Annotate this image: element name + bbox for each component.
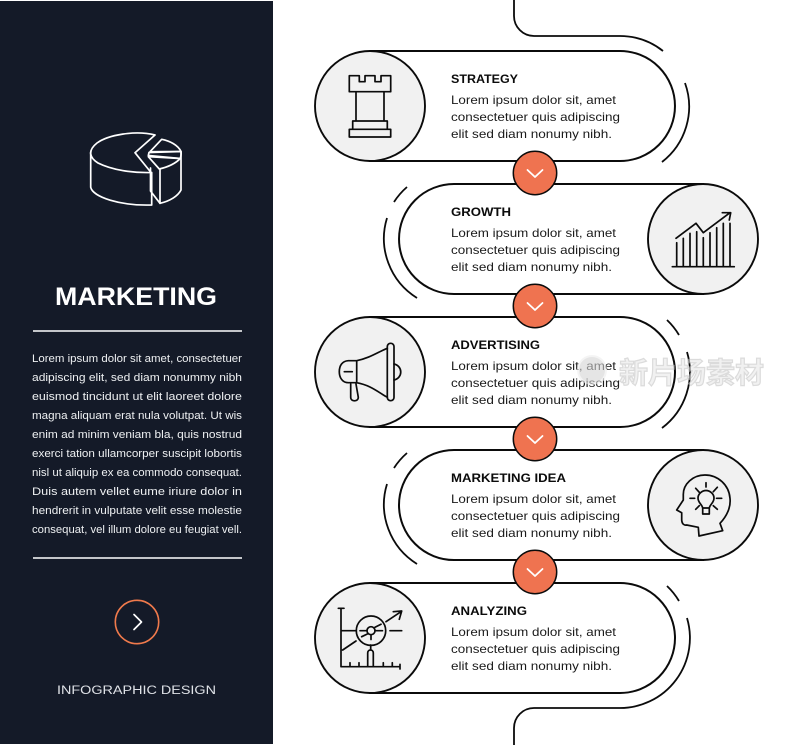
text: analyzing body: Lorem ipsum dolor sit, amet: [451, 626, 617, 639]
icon: chess rook: [315, 51, 425, 161]
sidebar paragraph: magna aliquam erat nula volutpat. Ut wis: [32, 410, 242, 422]
text: advertising body: consectetuer quis adipiscing: [451, 377, 620, 390]
heading: advertising: ADVERTISING: [451, 338, 540, 352]
icon: orange circle arrow: [115, 600, 159, 644]
sidebar paragraph: nisl ut aliquip ex ea commodo consequat.: [32, 467, 242, 479]
text: analyzing body: consectetuer quis adipiscing: [451, 643, 620, 656]
sidebar paragraph: [32, 353, 243, 536]
sidebar paragraph: euismod tincidunt ut elit laoreet dolore: [32, 391, 242, 403]
step 2: growth: [384, 184, 758, 298]
text: marketing idea body: Lorem ipsum dolor sit, amet: [451, 493, 617, 506]
badge: chevron 2: [513, 284, 557, 328]
watermark: 新片场素材: [619, 350, 764, 392]
sidebar paragraph: enim ad minim veniam bla, quis nostrud: [32, 429, 242, 441]
text: strategy body: [451, 94, 620, 141]
icon: 3D pie chart: [91, 133, 181, 205]
sidebar paragraph: consequat, vel illum dolore eu feugiat vell.: [32, 524, 242, 536]
text: advertising body: Lorem ipsum dolor sit, amet: [451, 360, 617, 373]
text: strategy body: elit sed diam nonumy nibh.: [451, 128, 612, 141]
sidebar paragraph: exerci tation ullamcorper suscipit lobortis: [32, 448, 242, 460]
icon: growth bar chart: [648, 184, 758, 294]
title: MARKETING: MARKETING: [55, 283, 217, 311]
panel: dark sidebar: [0, 1, 273, 744]
heading: analyzing: ANALYZING: [451, 604, 527, 618]
connector: top line and arc: [514, 0, 663, 51]
text: advertising body: [451, 360, 620, 407]
text: growth body: elit sed diam nonumy nibh.: [451, 261, 612, 274]
text: analyzing body: elit sed diam nonumy nibh.: [451, 660, 612, 673]
text: growth body: consectetuer quis adipiscing: [451, 244, 620, 257]
text: strategy body: consectetuer quis adipiscing: [451, 111, 620, 124]
step 1: strategy: [315, 51, 689, 162]
sidebar paragraph: Lorem ipsum dolor sit amet, consectetuer: [32, 353, 243, 365]
text: marketing idea body: consectetuer quis adipiscing: [451, 510, 620, 523]
text: marketing idea body: elit sed diam nonumy nibh.: [451, 527, 612, 540]
step 5: analyzing: [315, 583, 690, 745]
sidebar paragraph: hendrerit in vulputate velit esse molestie: [32, 505, 242, 517]
text: growth body: [451, 227, 620, 274]
step 4: marketing idea: [384, 450, 758, 564]
icon: head with light bulb: [648, 450, 758, 560]
heading: strategy: STRATEGY: [451, 72, 518, 86]
badge: chevron 3: [513, 417, 557, 461]
icon: megaphone: [315, 317, 425, 427]
heading: marketing idea: MARKETING IDEA: [451, 471, 566, 485]
step 3: advertising: [315, 317, 690, 428]
caption: infographic design: INFOGRAPHIC DESIGN: [57, 683, 216, 697]
icon: magnifier over chart: [315, 583, 425, 693]
text: analyzing body: [451, 626, 620, 673]
text: marketing idea body: [451, 493, 620, 540]
badge: chevron 1: [513, 151, 557, 195]
badge: chevron 4: [513, 550, 557, 594]
sidebar paragraph: adipiscing elit, sed diam nonummy nibh: [32, 372, 242, 384]
text: advertising body: elit sed diam nonumy nibh.: [451, 394, 612, 407]
text: growth body: Lorem ipsum dolor sit, amet: [451, 227, 617, 240]
sidebar paragraph: Duis autem vellet eume iriure dolor in: [32, 486, 242, 498]
heading: growth: GROWTH: [451, 205, 511, 219]
text: strategy body: Lorem ipsum dolor sit, amet: [451, 94, 617, 107]
